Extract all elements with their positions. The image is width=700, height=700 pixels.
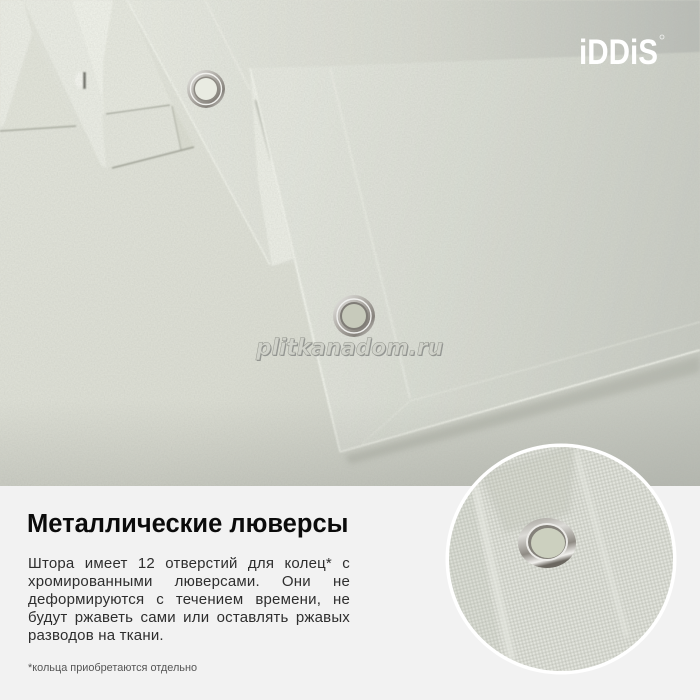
shadow under main panel [345, 356, 700, 464]
seams [475, 450, 627, 660]
photo: curtain fabric with metal eyelets [0, 0, 700, 486]
footnote: *кольца приобретаются отдельно [28, 662, 197, 674]
main hem panel [250, 52, 700, 452]
top-left fold pieces [0, 0, 194, 168]
body text: разводов на ткани. [28, 627, 164, 644]
bottom darkening [0, 400, 700, 486]
grain texture [0, 0, 700, 486]
heading: Металлические люверсы [27, 510, 348, 538]
logo: iDDiS: iDDiS [579, 33, 658, 72]
upper band with eyelet [127, 0, 700, 266]
eyelet: upper [187, 70, 225, 108]
cloth folds group [0, 0, 700, 464]
body text: будут ржаветь сами или оставлять ржавых [28, 609, 350, 626]
grommet [518, 518, 576, 568]
watermark: plitkanadom.ru: plitkanadom.ru [256, 336, 444, 362]
fabric circle with white border [445, 443, 677, 675]
hem stitching [250, 68, 700, 452]
body text: Штора имеет 12 отверстий для колец* с [28, 555, 350, 572]
upper band stitching [205, 0, 250, 90]
circular detail: eyelet close-up [446, 444, 676, 674]
body text: хромированными люверсами. Они не [28, 573, 350, 590]
eyelet: lower [333, 295, 375, 337]
folded flap [250, 68, 295, 266]
body text [28, 555, 350, 644]
background cloth [0, 0, 700, 486]
body text: деформируются с течением времени, не [28, 591, 350, 608]
watermark: plitkanadom.ru: plitkanadom.ru [255, 335, 443, 361]
